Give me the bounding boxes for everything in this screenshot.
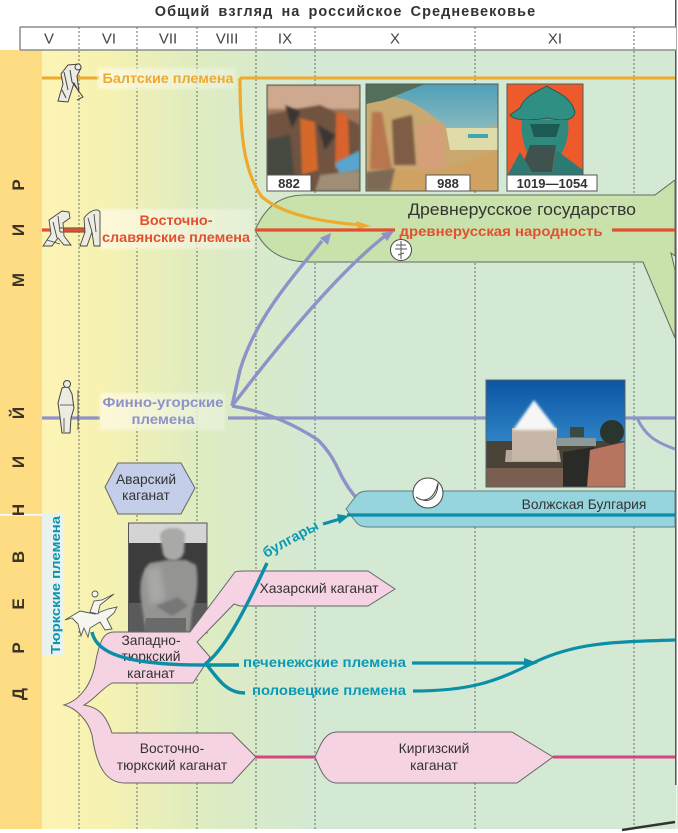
century labels: V xyxy=(44,30,54,48)
panel: Volga Bulgaria xyxy=(346,491,675,527)
text: Baltic tribes label: Балтские племена xyxy=(102,70,234,86)
text: Eastern Turkic Khaganate: Восточно- xyxy=(140,741,204,756)
icon: crescent medallion xyxy=(413,478,443,508)
panel: Kirgiz Khaganate: каганат xyxy=(410,758,459,773)
line: Polovtsian stem xyxy=(207,665,245,693)
icon: Finno-Ugric warrior xyxy=(58,380,78,433)
line: Finno-Ugric tribes xyxy=(42,416,675,420)
dotted century dividers xyxy=(79,27,634,829)
panel: Avar Khaganate: каганат xyxy=(122,488,171,503)
line: East Slavic tribes xyxy=(42,228,675,232)
text: Pecheneg tribes: печенежские племена xyxy=(243,655,407,670)
arrow: Bulgars tribe line xyxy=(205,563,267,664)
panel: Volga Bulgaria: Волжская Булгария xyxy=(522,497,646,512)
side label: ancient world xyxy=(9,179,28,700)
decorative bottom black stroke xyxy=(622,822,675,830)
side label: ancient world: В xyxy=(9,551,28,563)
text: Western Turkic Khaganate: каганат xyxy=(127,666,176,681)
side label: ancient world: И xyxy=(9,456,28,468)
century header row xyxy=(20,27,676,50)
portrait: Yaroslav the Wise xyxy=(507,84,597,191)
text: Old Russian people: древнерусская народность xyxy=(400,223,603,239)
text: Western Turkic Khaganate: тюркский xyxy=(122,649,180,664)
text: Western Turkic Khaganate: Западно- xyxy=(121,633,181,648)
arrow: Bulgars into Volga Bulgaria xyxy=(323,514,349,524)
side label: ancient world: Е xyxy=(9,598,28,610)
arrow: Pecheneg tribes xyxy=(412,658,538,668)
panel: Old Russian state xyxy=(255,180,675,338)
text: East Slavic tribes label xyxy=(100,209,254,249)
date label: 882: 882 xyxy=(278,176,300,191)
text: Finno-Ugric tribes label xyxy=(100,393,225,430)
text: Finno-Ugric tribes label: Финно-угорские xyxy=(102,394,224,410)
text: Khazar Khaganate: Хазарский каганат xyxy=(259,580,379,596)
photo: Bulgar mausoleum xyxy=(486,380,625,487)
text: Finno-Ugric tribes label: племена xyxy=(132,411,195,427)
text: Eastern Turkic Khaganate: тюркский каганат xyxy=(117,758,228,773)
side label: ancient world: Д xyxy=(9,688,28,700)
text: Western Turkic Khaganate xyxy=(121,633,181,681)
century labels: VIII xyxy=(216,30,238,48)
photo: stone statue xyxy=(129,523,207,633)
text: East Slavic tribes label: Восточно- xyxy=(140,212,213,228)
painting: 882 xyxy=(267,85,360,191)
panel: Kirgiz Khaganate xyxy=(315,732,553,783)
date label: 1019-1054: 1019—1054 xyxy=(517,176,588,191)
side label: ancient world: Р xyxy=(9,179,28,191)
panel: Western Turkic and Khazar Khaganates xyxy=(64,571,395,783)
icon: Baltic farmer figure xyxy=(58,64,83,102)
line: Baltic tribes xyxy=(42,76,675,80)
date label: 988: 988 xyxy=(437,176,459,191)
decorative notch at right edge xyxy=(671,253,675,270)
icon: Turkic horseman xyxy=(65,591,117,637)
arrows: Finno-Ugric tribes into Old Russian state xyxy=(232,231,394,513)
text: Eastern Turkic Khaganate xyxy=(117,741,228,773)
line: Kirgiz connection xyxy=(256,756,675,758)
vertical label: Turkic tribes: Тюркские племена xyxy=(49,515,63,654)
side label: ancient world: М xyxy=(9,273,28,287)
panel: Avar Khaganate xyxy=(105,463,195,514)
century labels xyxy=(44,30,562,48)
panel: Kirgiz Khaganate: Киргизский xyxy=(399,741,469,756)
line: Turkic tribes stem xyxy=(92,632,239,665)
side label: ancient world: Р xyxy=(9,642,28,654)
painting: 988 xyxy=(366,84,498,191)
panel: Avar Khaganate: Аварский xyxy=(116,472,176,487)
side label: ancient world: Й xyxy=(9,407,28,419)
icon: East Slavic ploughman xyxy=(43,210,100,246)
title: Общий взгляд на российское Средневековье xyxy=(155,4,536,20)
century labels: XI xyxy=(548,30,562,48)
arrow: Baltic tribes into Old Russian people xyxy=(240,78,371,229)
side label: ancient world: Н xyxy=(9,504,28,516)
text: Polovtsian tribes: половецкие племена xyxy=(252,683,407,698)
icon: Orthodox cross medallion xyxy=(390,240,412,260)
line: Polovtsian tribes xyxy=(413,640,675,691)
text: Bulgars label: булгары xyxy=(260,518,321,561)
century labels: VI xyxy=(102,30,116,48)
century labels: VII xyxy=(159,30,177,48)
century labels: IX xyxy=(278,30,292,48)
side label: ancient world: И xyxy=(9,224,28,236)
text: East Slavic tribes label: славянские племена xyxy=(102,229,250,245)
century labels: X xyxy=(390,30,400,48)
line: Finno-Ugric branch right xyxy=(637,418,675,449)
text: Old Russian state: Древнерусское государство xyxy=(408,201,636,219)
